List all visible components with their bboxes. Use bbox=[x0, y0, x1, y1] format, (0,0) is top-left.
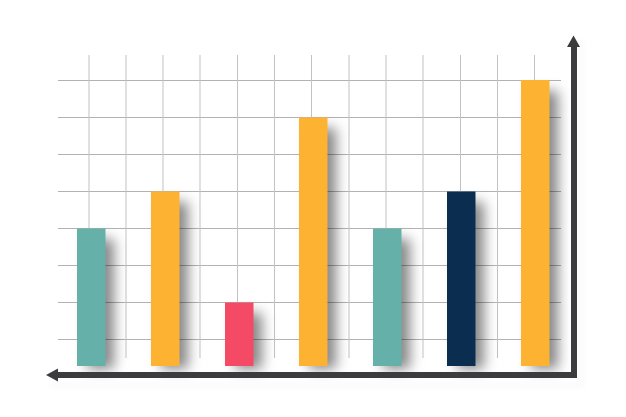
bar shadows bbox=[87, 91, 558, 369]
bar: amber 7 bbox=[521, 80, 550, 366]
bar: teal 1 bbox=[77, 228, 106, 366]
bar: navy 6 bbox=[447, 192, 476, 366]
axis shadow bbox=[50, 40, 581, 385]
bar: amber 2 bbox=[151, 192, 180, 366]
bar: teal 5 bbox=[373, 228, 402, 366]
bar: red 3 bbox=[225, 302, 254, 366]
arrow: horizontal axis bbox=[46, 36, 580, 382]
bar: amber 4 bbox=[299, 118, 328, 366]
